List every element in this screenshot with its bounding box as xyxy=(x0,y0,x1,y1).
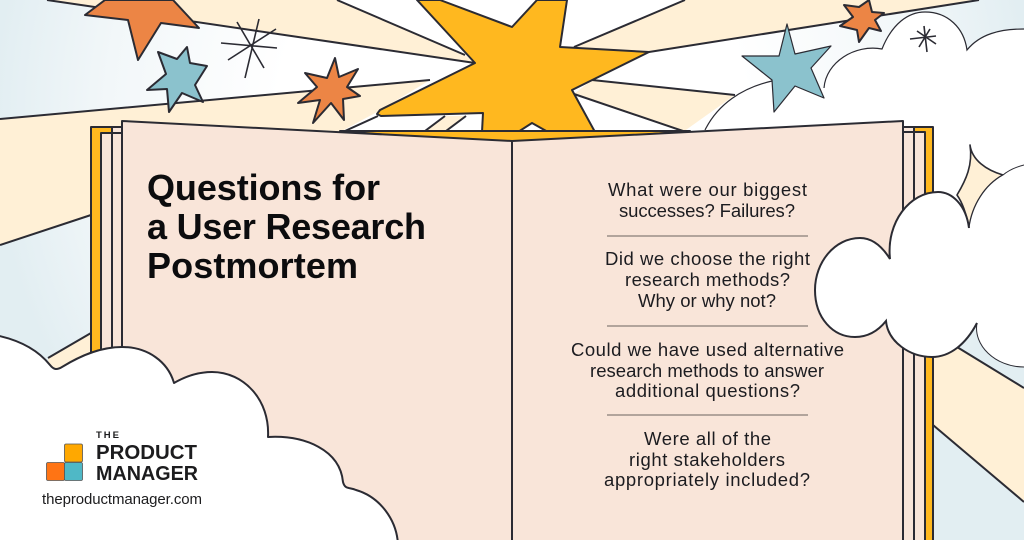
question 4: right stakeholders xyxy=(629,449,785,470)
question 4 xyxy=(604,428,810,490)
bottom left cloud xyxy=(0,335,398,540)
logo wordmark: MANAGER xyxy=(96,463,199,485)
logo xyxy=(42,430,202,508)
logo wordmark: PRODUCT xyxy=(96,442,197,464)
right page xyxy=(512,121,903,540)
orange star: left xyxy=(298,58,360,123)
heading: Questions for xyxy=(147,167,380,208)
logo wordmark xyxy=(96,430,199,485)
cover wedge behind pages xyxy=(340,131,690,145)
sparkle diamond gap xyxy=(957,145,1003,228)
logo icon xyxy=(46,444,82,480)
question 2: Did we choose the right xyxy=(605,248,810,269)
upper right cloud xyxy=(705,12,1024,240)
question 3 xyxy=(571,339,844,401)
blue star: right xyxy=(742,24,831,112)
inner pages xyxy=(101,127,925,540)
orange star: right xyxy=(840,0,884,42)
cloud far edge xyxy=(969,165,1024,367)
question 2 xyxy=(605,248,810,311)
cloud body xyxy=(815,165,1024,367)
heading: Postmortem xyxy=(147,245,358,286)
book cover edges xyxy=(91,127,933,540)
question 1: successes? Failures? xyxy=(619,200,795,221)
heading xyxy=(147,167,426,286)
question 2: research methods? xyxy=(625,269,790,290)
left page xyxy=(122,121,512,540)
question 4: Were all of the xyxy=(644,428,771,449)
orange star: top left xyxy=(85,0,199,60)
blue star: left xyxy=(147,47,207,112)
question 3: research methods to answer xyxy=(590,360,824,381)
open book xyxy=(91,121,933,540)
lower right cloud xyxy=(815,145,1024,367)
question 1: What were our biggest xyxy=(608,179,807,200)
heading: a User Research xyxy=(147,206,426,247)
question 4: appropriately included? xyxy=(604,469,810,490)
cloud outline xyxy=(815,192,977,357)
sparkle: right xyxy=(910,26,936,52)
question 1 xyxy=(608,179,807,221)
website url: theproductmanager.com xyxy=(42,491,202,508)
question 3: additional questions? xyxy=(615,380,800,401)
question 2: Why or why not? xyxy=(638,290,776,311)
question 3: Could we have used alternative xyxy=(571,339,844,360)
upper right cloud outline xyxy=(705,12,1024,130)
large yellow star xyxy=(377,0,649,132)
sparkle: left xyxy=(221,19,277,78)
logo wordmark: THE xyxy=(96,430,119,441)
